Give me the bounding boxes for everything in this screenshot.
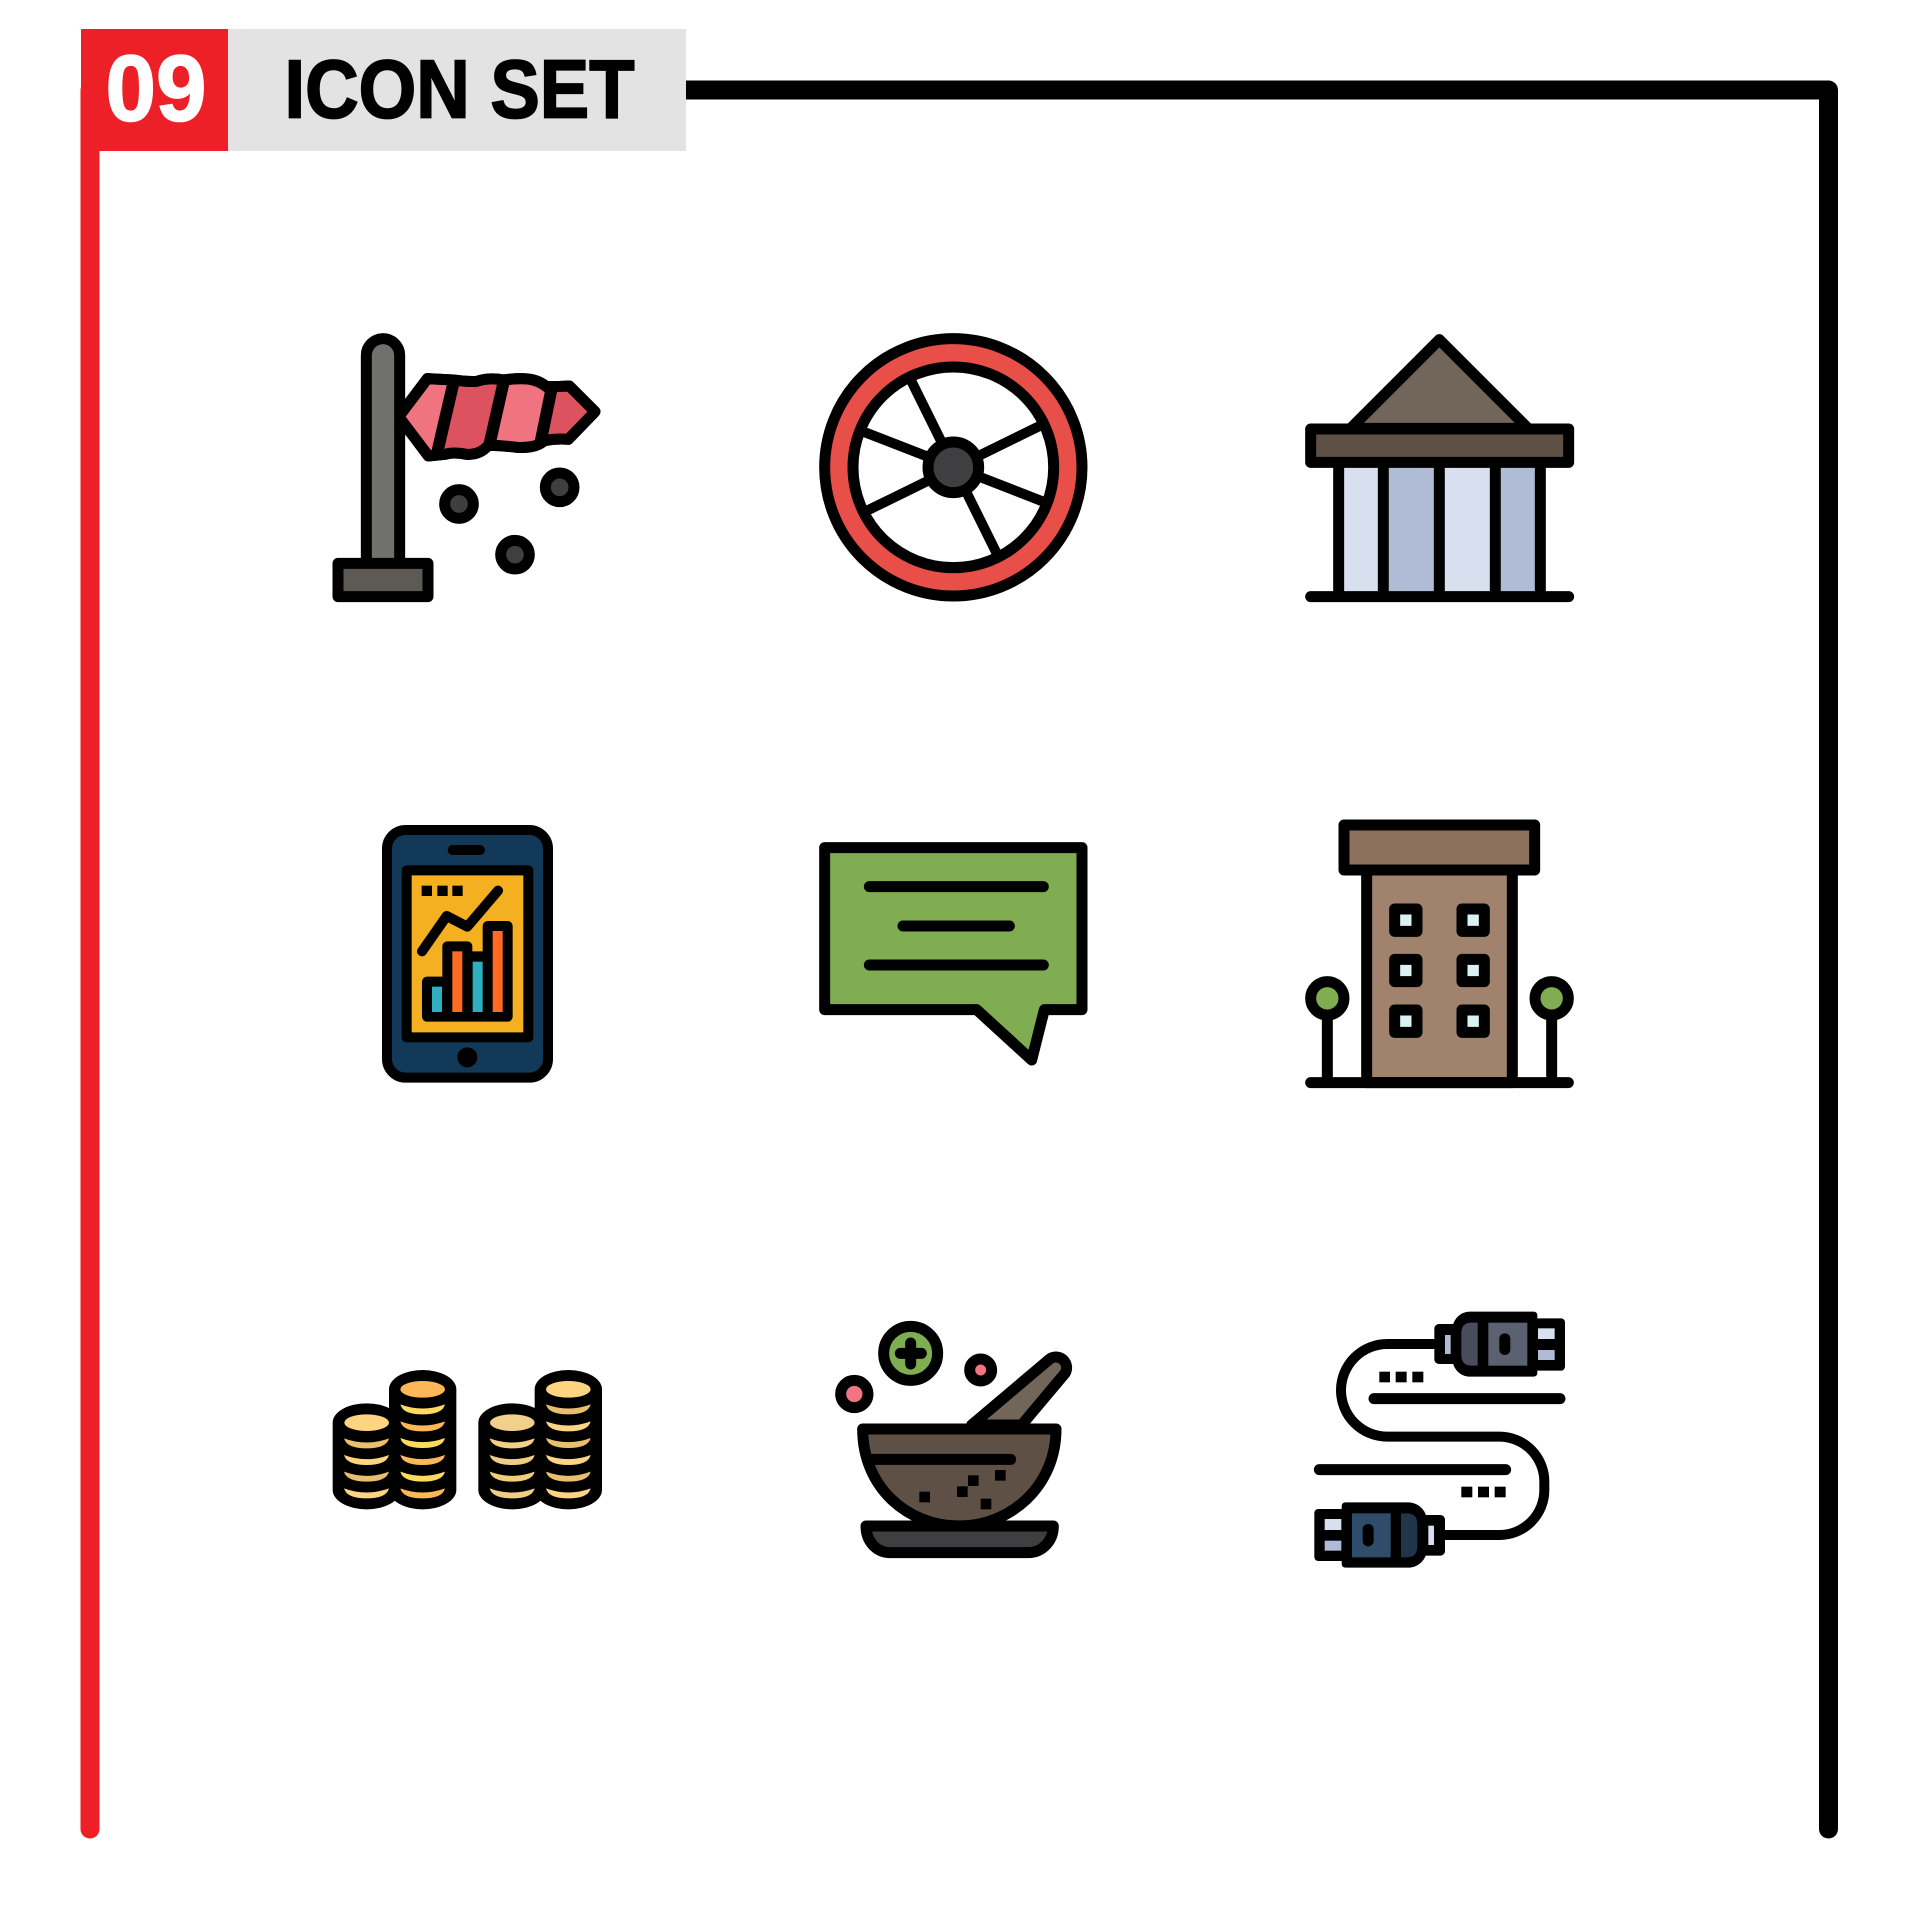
coin stack 3 [478, 1403, 546, 1509]
icon: coin stacks [333, 1370, 602, 1509]
icon: tower building with trees [1311, 825, 1568, 1083]
icon: speech bubble [825, 848, 1082, 1060]
icon: windsock [338, 339, 595, 597]
icon: smartphone with chart [387, 830, 548, 1078]
coin stack 2 [389, 1370, 456, 1509]
coin stack 4 [535, 1370, 602, 1509]
frame: red left border [80, 90, 100, 1829]
top usb plug [1434, 1312, 1565, 1377]
frame: black top and right border [680, 90, 1828, 1829]
title text: ICON SET [284, 42, 634, 136]
coin stack 1 [333, 1403, 401, 1509]
icon: mortar and pestle [841, 1326, 1067, 1553]
icon: steering wheel [825, 339, 1082, 596]
number badge text: 09 [106, 36, 206, 140]
bottom usb plug [1314, 1502, 1445, 1568]
icon: usb cable [1314, 1312, 1565, 1568]
icon: bank building [1311, 340, 1569, 597]
title banner [81, 29, 686, 151]
